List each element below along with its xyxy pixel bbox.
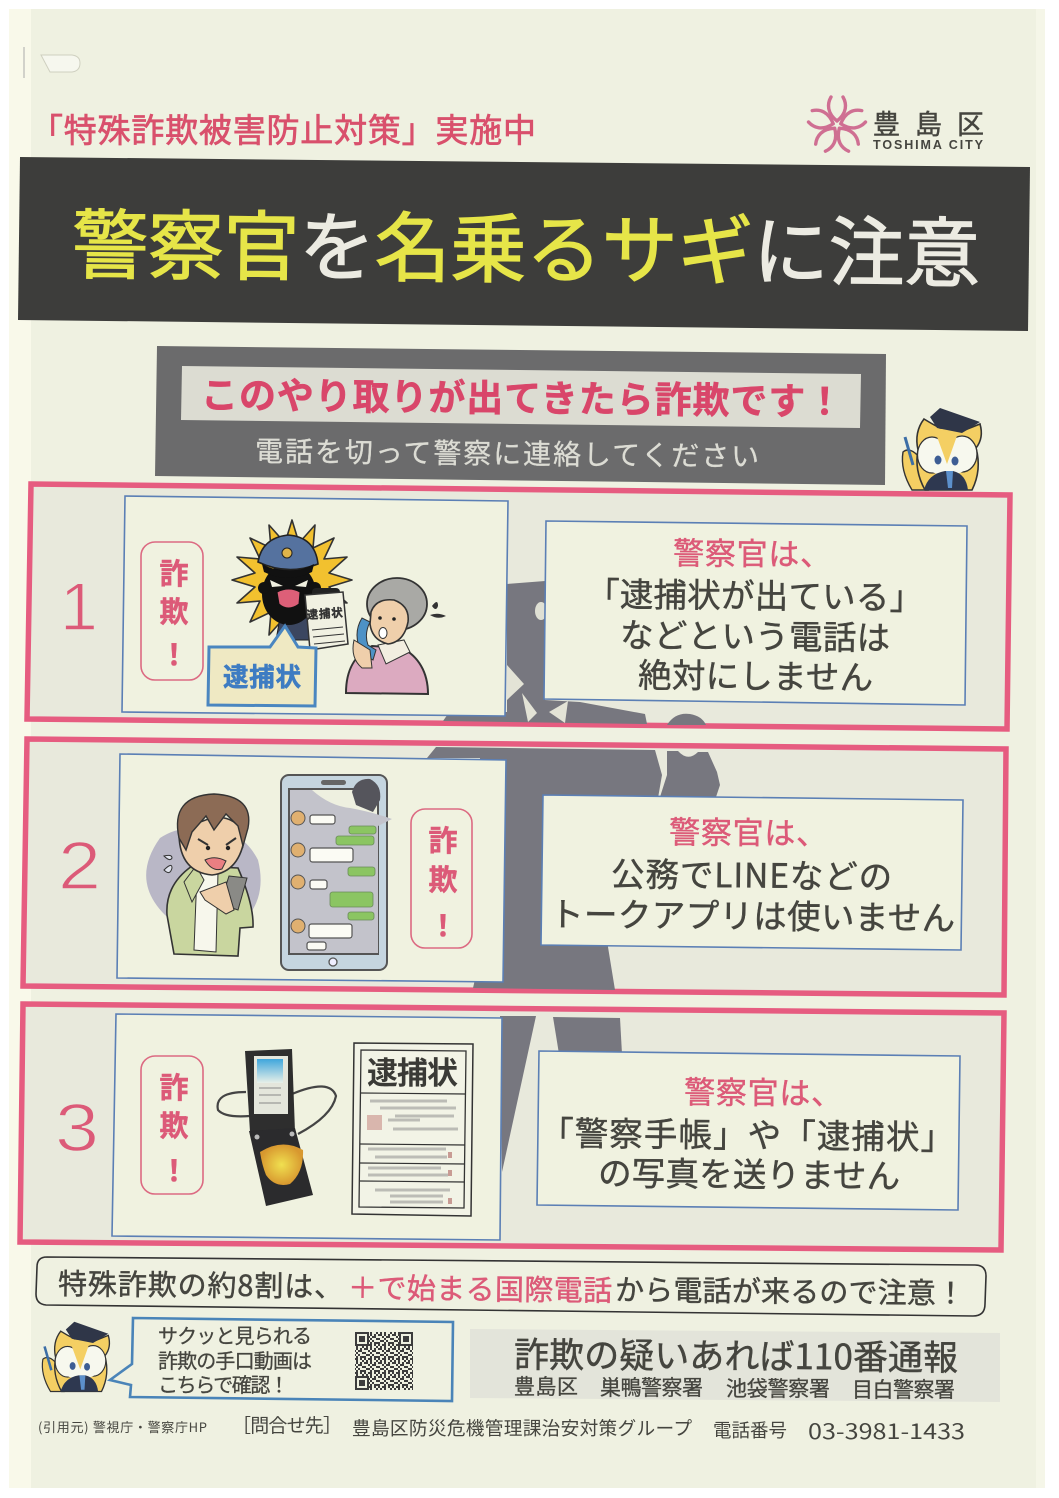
illustration: chat phone bbox=[281, 775, 392, 970]
number 1: 1 bbox=[60, 569, 98, 645]
footer: contact: 豊島区防災危機管理課治安対策グループ bbox=[352, 1414, 692, 1441]
illustration: police notebook bbox=[218, 1049, 336, 1206]
message text: 警察官は、 bbox=[684, 1067, 842, 1114]
heading: campaign notice: 「特殊詐欺被害防止対策」実施中 bbox=[30, 104, 536, 152]
scam tag: ！ bbox=[159, 1148, 189, 1190]
bubble text: サクッと見られる bbox=[158, 1320, 312, 1349]
scam tag: 詐 bbox=[159, 551, 189, 593]
message text: などという電話は bbox=[620, 608, 890, 660]
warning instruction: 電話を切って警察に連絡してください bbox=[255, 430, 759, 475]
illustration: fake police officer bbox=[232, 520, 352, 650]
message text: 「逮捕状が出ている」 bbox=[586, 567, 923, 620]
notice text: ＋で始まる国際電話 bbox=[348, 1265, 612, 1310]
footer: contact: ［問合せ先］ bbox=[232, 1411, 342, 1438]
scam tag: ！ bbox=[428, 903, 458, 945]
message text bbox=[586, 528, 923, 699]
scam tag bbox=[141, 1056, 203, 1194]
message text: 警察官は、 bbox=[669, 807, 827, 854]
suit silhouette bbox=[500, 1016, 536, 1172]
bubble text: 詐欺の手口動画は bbox=[158, 1345, 312, 1374]
owl mascot top bbox=[902, 408, 981, 490]
police stations bbox=[514, 1371, 955, 1404]
footer: source: (引用元) 警視庁・警察庁HP bbox=[38, 1417, 207, 1436]
illustration: fake police officer: 逮捕状 bbox=[306, 604, 344, 623]
scam tag: 欺 bbox=[159, 589, 189, 631]
number 3: 3 bbox=[55, 1090, 99, 1166]
panel 3 bbox=[20, 1004, 1004, 1250]
suit silhouette bbox=[427, 747, 662, 990]
police stations: 目白警察署 bbox=[852, 1374, 955, 1404]
panel 1 bbox=[27, 484, 1010, 729]
warning box bbox=[155, 346, 886, 485]
footer: contact: 電話番号 bbox=[713, 1417, 787, 1443]
title banner bbox=[18, 157, 1030, 331]
message text bbox=[550, 807, 955, 940]
message text: 公務でLINEなどの bbox=[611, 847, 892, 899]
message frame bbox=[541, 795, 963, 950]
illustration frame bbox=[117, 754, 506, 982]
scam tag: ！ bbox=[159, 632, 189, 674]
message frame bbox=[537, 1051, 960, 1210]
police stations: 巣鴨警察署 bbox=[600, 1372, 703, 1402]
speech bubble: video link bbox=[110, 1318, 453, 1401]
notice text: から電話が来るので注意！ bbox=[615, 1267, 965, 1313]
illustration: arrest warrant document: 逮捕状 bbox=[367, 1048, 458, 1093]
scam tag: 欺 bbox=[159, 1103, 189, 1145]
QR code bbox=[355, 1332, 413, 1390]
warning headline: このやり取りが出てきたら詐欺です！ bbox=[201, 365, 843, 426]
scam tag: 欺 bbox=[428, 857, 458, 899]
binding clip mark bbox=[24, 47, 80, 78]
bubble text bbox=[158, 1320, 312, 1398]
message text: 警察官は、 bbox=[673, 528, 831, 575]
illustration frame bbox=[112, 1014, 502, 1240]
logo: Toshima City bbox=[808, 97, 984, 153]
callout: arrest warrant bbox=[208, 626, 316, 706]
call 110 text: 詐欺の疑いあれば110番通報 bbox=[514, 1327, 958, 1381]
message text: 「警察手帳」や「逮捕状」 bbox=[540, 1106, 954, 1159]
scam tag bbox=[411, 809, 472, 948]
title text: 警察官を名乗るサギに注意 bbox=[72, 184, 981, 303]
message text: トークアプリは使いません bbox=[550, 887, 955, 940]
police contact panel bbox=[470, 1327, 1000, 1404]
footer: contact bbox=[232, 1411, 965, 1446]
logo wordmark: 豊島区 bbox=[873, 103, 984, 142]
message text bbox=[540, 1067, 954, 1198]
owl mascot bottom bbox=[42, 1322, 109, 1392]
logo english name: TOSHIMA CITY bbox=[873, 138, 984, 152]
number 2: 2 bbox=[58, 828, 101, 904]
illustration: worried man with phone bbox=[146, 794, 261, 956]
illustration: arrest warrant document bbox=[352, 1043, 473, 1216]
notice bar: international calls bbox=[36, 1257, 986, 1316]
scam tag: 詐 bbox=[159, 1065, 189, 1107]
bubble text: こちらで確認！ bbox=[158, 1369, 289, 1398]
illustration: elderly woman on phone bbox=[346, 578, 446, 694]
message text: の写真を送りません bbox=[598, 1146, 900, 1198]
footer: contact: 03-3981-1433 bbox=[808, 1416, 965, 1446]
suit silhouette bbox=[443, 581, 647, 724]
scam tag: 詐 bbox=[428, 818, 458, 860]
message text: 絶対にしません bbox=[638, 648, 873, 699]
police stations: 池袋警察署 bbox=[726, 1373, 830, 1403]
notice text: 特殊詐欺の約8割は、 bbox=[58, 1261, 343, 1306]
illustration frame bbox=[122, 496, 508, 716]
notice text bbox=[58, 1261, 965, 1313]
icon: cherry blossom bbox=[808, 97, 866, 153]
police stations: 豊島区 bbox=[514, 1371, 578, 1401]
callout: arrest warrant: 逮捕状 bbox=[223, 657, 301, 694]
panel 2 bbox=[23, 739, 1006, 995]
scam tag bbox=[141, 542, 203, 680]
message frame bbox=[544, 521, 967, 705]
